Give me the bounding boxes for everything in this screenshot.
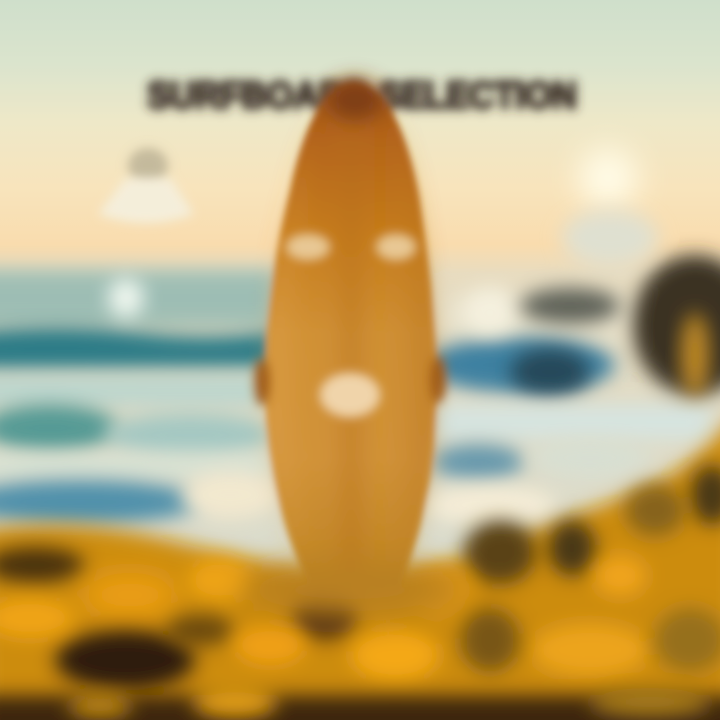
dark rocks — [520, 255, 720, 397]
surfboard — [254, 80, 437, 585]
right faded icon — [562, 210, 658, 266]
board left label — [286, 234, 330, 260]
board right label — [376, 234, 416, 260]
left faded icon — [98, 148, 194, 223]
foliage overlapping board base — [240, 564, 460, 616]
sun glow — [578, 148, 638, 208]
foreground golden foliage — [0, 410, 720, 720]
right fin — [430, 356, 446, 404]
board centre label — [320, 373, 380, 417]
board nose tip — [327, 80, 383, 120]
ocean waves — [0, 270, 720, 525]
board left fin — [254, 358, 270, 406]
title: SURFBOARD SELECTION — [147, 75, 577, 117]
